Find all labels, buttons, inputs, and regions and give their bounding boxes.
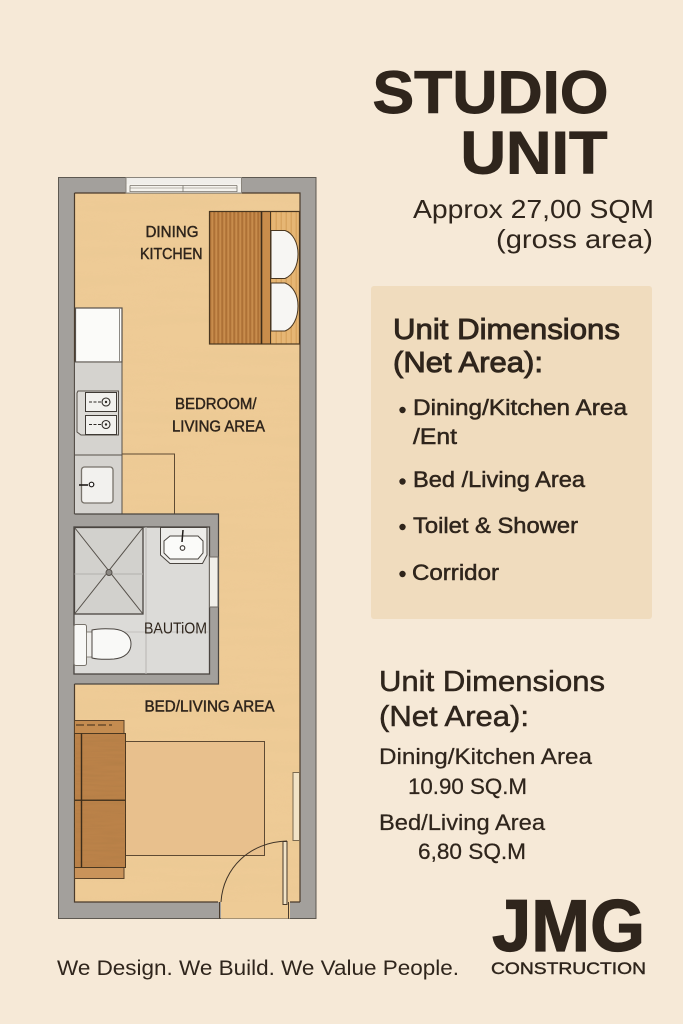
heading: [379, 666, 605, 733]
title: STUDIO: [372, 59, 608, 126]
logo: CONSTRUCTION: [491, 960, 646, 978]
list item: dining kitchen: /Ent: [413, 424, 457, 449]
title: [372, 59, 608, 186]
rug outline: [122, 454, 174, 514]
net area dimensions: [379, 666, 605, 864]
fridge: [76, 308, 122, 362]
toilet: [74, 624, 131, 666]
gross area subtitle: (gross area): [496, 224, 653, 254]
label: dining kitchen: KITCHEN: [140, 246, 202, 263]
shower: [74, 528, 143, 614]
label: bedroom living area: BEDROOM/: [175, 396, 257, 413]
label: bedroom living area: [172, 396, 266, 436]
label: dining kitchen: [140, 224, 202, 263]
bed headboard: [74, 720, 126, 878]
gross area subtitle: Approx 27,00 SQM: [413, 194, 654, 224]
bathroom window: [210, 557, 218, 607]
window top: [126, 178, 242, 193]
list item: dining kitchen: [399, 395, 628, 449]
logo: JMG: [492, 886, 645, 967]
tagline: We Design. We Build. We Value People.: [57, 957, 459, 980]
wardrobe strip: [293, 772, 300, 840]
bed living area value: Bed/Living Area: [379, 810, 546, 835]
panel heading: [393, 314, 620, 379]
kitchen sink: [79, 467, 113, 503]
list item: toilet shower: Toilet & Shower: [413, 513, 578, 538]
dining kitchen area value: Dining/Kitchen Area: [379, 744, 593, 769]
list item: bed living: Bed /Living Area: [413, 467, 586, 492]
bathroom: [59, 514, 218, 684]
cooktop: [77, 391, 118, 435]
panel heading: (Net Area):: [393, 347, 543, 379]
bed living area value: 6,80 SQ.M: [418, 839, 526, 864]
label: bed living area: BED/LIVING AREA: [144, 698, 275, 716]
label: dining kitchen: DINING: [146, 224, 198, 241]
panel: unit dimensions list: [371, 286, 652, 619]
dining kitchen area value: 10.90 SQ.M: [408, 774, 527, 799]
outer walls: [58, 178, 316, 918]
dining table: [210, 212, 300, 344]
floor plan: [58, 178, 316, 918]
list item: dining kitchen: Dining/Kitchen Area: [413, 395, 628, 420]
title: UNIT: [460, 120, 608, 186]
door: [220, 841, 288, 918]
list item: corridor: Corridor: [412, 560, 499, 585]
bathroom sink: [160, 528, 207, 564]
bed mattress: [126, 742, 264, 856]
kitchen counter: [74, 308, 122, 514]
panel heading: Unit Dimensions: [393, 314, 620, 346]
label: bedroom living area: LIVING AREA: [172, 418, 266, 436]
dining kitchen area value: [379, 744, 593, 799]
label: bathroom: BAUTiOM: [144, 620, 207, 638]
wood floor: [74, 193, 300, 918]
dining chairs: [271, 230, 298, 331]
gross area subtitle: [413, 194, 654, 254]
heading: (Net Area):: [379, 701, 529, 733]
heading: Unit Dimensions: [379, 666, 605, 698]
bed living area value: [379, 810, 546, 864]
